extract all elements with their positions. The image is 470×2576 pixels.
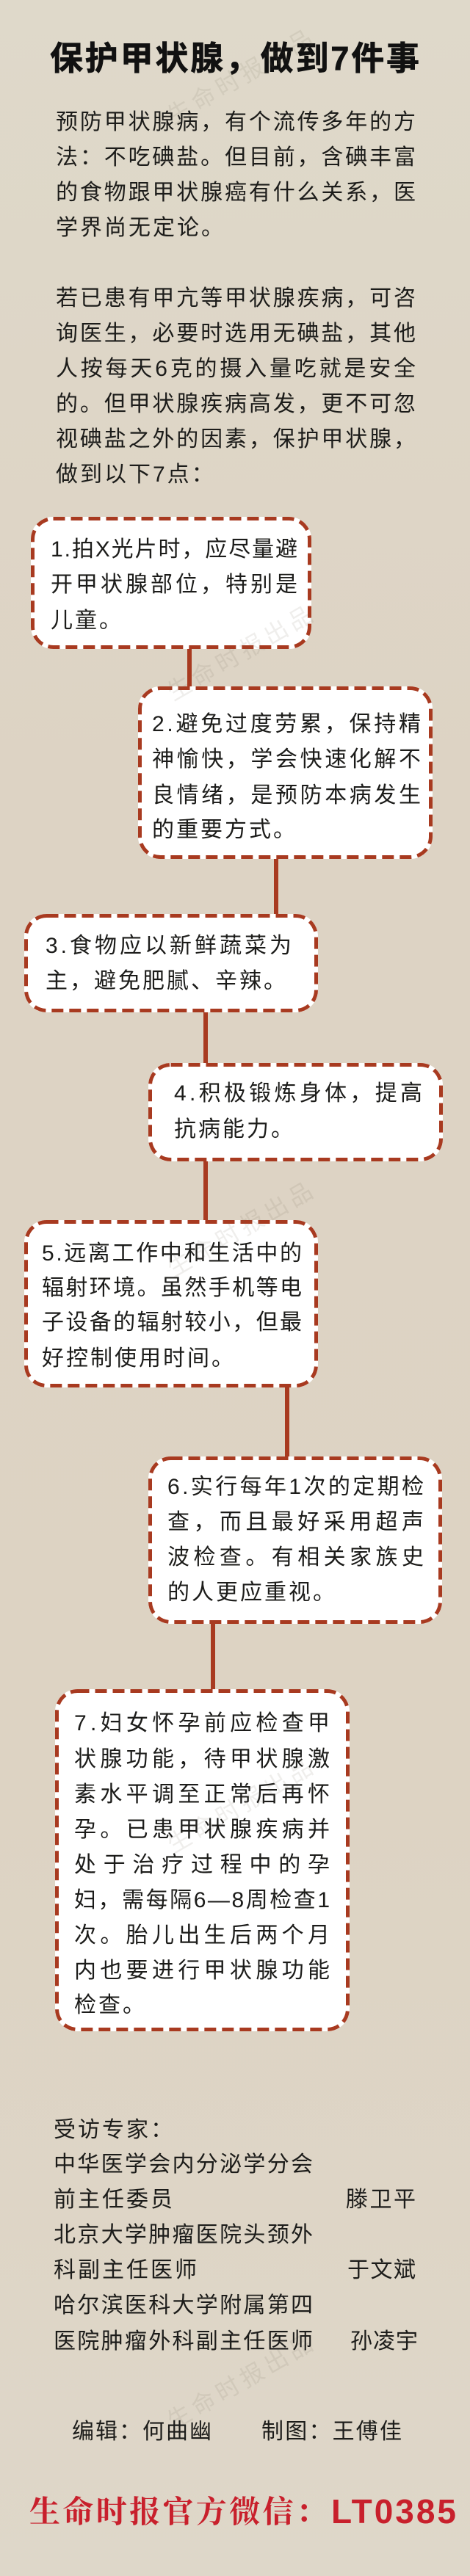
intro text block: 人按每天6克的摄入量吃就是安全	[56, 357, 416, 381]
panel: step 2	[140, 689, 430, 857]
interviewed experts: 孙凌宇	[350, 2329, 418, 2354]
panel: step 5: 5.远离工作中和生活中的	[42, 1241, 302, 1266]
panel: step 2: 2.避免过度劳累，保持精	[152, 712, 421, 736]
editor credits: 制图：王傅佳	[261, 2420, 402, 2444]
panel: step 4	[150, 1064, 441, 1160]
interviewed experts: 医院肿瘤外科副主任医师	[54, 2329, 313, 2354]
panel: step 6: 查，而且最好采用超声	[167, 1510, 424, 1534]
intro text block: 的食物跟甲状腺癌有什么关系，医	[56, 181, 416, 205]
panel: step 7: 内也要进行甲状腺功能	[74, 1959, 330, 1983]
official wechat line	[29, 2492, 456, 2530]
panel: step 3	[26, 916, 316, 1010]
interviewed experts: 前主任委员	[54, 2188, 175, 2212]
panel: step 3: 主，避免肥腻、辛辣。	[46, 969, 288, 993]
panel: step 6: 的人更应重视。	[167, 1581, 337, 1605]
intro text block: 若已患有甲亢等甲状腺疾病，可咨	[56, 286, 416, 311]
editor credits	[72, 2420, 402, 2444]
panel: step 5: 子设备的辐射较小，但最	[42, 1310, 302, 1335]
panel: step 2: 神愉快，学会快速化解不	[152, 747, 421, 772]
panel: step 7: 素水平调至正常后再怀	[74, 1782, 330, 1807]
intro text block: 的。但甲状腺疾病高发，更不可忽	[56, 392, 416, 416]
panel: step 2: 的重要方式。	[152, 818, 297, 842]
panel: step 7: 7.妇女怀孕前应检查甲	[74, 1711, 330, 1735]
panel: step 5: 辐射环境。虽然手机等电	[42, 1276, 302, 1300]
panel: step 1: 儿童。	[51, 609, 123, 633]
interviewed experts: 于文斌	[347, 2258, 416, 2282]
panel: step 1	[32, 518, 310, 647]
panel: step 7: 处于治疗过程中的孕	[74, 1853, 330, 1877]
watermark: footer: 生命时报出品	[163, 2328, 321, 2434]
connector: step 2 to 3	[274, 859, 278, 915]
connector: step 5 to 6	[285, 1387, 289, 1457]
panel: step 7: 次。胎儿出生后两个月	[74, 1923, 330, 1948]
connector: step 3 to 4	[203, 1012, 208, 1064]
panel: step 4: 4.积极锻炼身体，提高	[174, 1081, 422, 1106]
panel: step 7: 妇，需每隔6—8周检查1	[74, 1888, 330, 1912]
watermark: step 7: 生命时报出品	[163, 1752, 321, 1858]
panel: step 4: 抗病能力。	[174, 1117, 295, 1142]
intro text block: 预防甲状腺病，有个流传多年的方	[56, 110, 416, 134]
panel: step 7: 状腺功能，待甲状腺激	[74, 1747, 330, 1771]
panel: step 1: 1.拍X光片时，应尽量避	[51, 537, 297, 562]
interviewed experts	[54, 2118, 418, 2354]
intro text block	[56, 110, 416, 487]
interviewed experts: 科副主任医师	[54, 2258, 199, 2282]
watermark: step 5: 生命时报出品	[163, 1175, 321, 1282]
panel: step 6: 波检查。有相关家族史	[167, 1545, 424, 1570]
intro text block: 法：不吃碘盐。但目前，含碘丰富	[56, 145, 416, 170]
interviewed experts: 北京大学肿瘤医院头颈外	[54, 2223, 313, 2247]
interviewed experts: 受访专家：	[54, 2118, 175, 2142]
official wechat line: 生命时报官方微信：	[29, 2495, 327, 2530]
interviewed experts: 滕卫平	[346, 2188, 416, 2212]
panel: step 1: 开甲状腺部位，特别是	[51, 573, 297, 597]
panel: step 2: 良情绪，是预防本病发生	[152, 783, 421, 808]
editor credits: 编辑：何曲幽	[72, 2420, 212, 2444]
panel: step 5: 好控制使用时间。	[42, 1346, 236, 1371]
intro text block: 做到以下7点：	[56, 462, 216, 487]
panel: step 6	[150, 1458, 441, 1622]
connector: step 6 to 7	[211, 1624, 215, 1690]
watermark: top: 生命时报出品	[163, 23, 321, 129]
intro text block: 学界尚无定论。	[56, 216, 225, 240]
interviewed experts: 中华医学会内分泌学分会	[54, 2152, 313, 2177]
panel: step 3: 3.食物应以新鲜蔬菜为	[46, 934, 292, 958]
intro text block: 询医生，必要时选用无碘盐，其他	[56, 322, 416, 346]
panel: step 5	[26, 1222, 316, 1386]
connector: step 1 to 2	[187, 649, 192, 687]
watermark: step 1-2: 生命时报出品	[163, 599, 321, 705]
connector: step 4 to 5	[203, 1161, 208, 1221]
title: 保护甲状腺，做到7件事	[50, 40, 419, 77]
panel: step 7: 孕。已患甲状腺疾病并	[74, 1818, 330, 1842]
interviewed experts: 哈尔滨医科大学附属第四	[54, 2293, 313, 2318]
panel: step 6: 6.实行每年1次的定期检	[167, 1475, 424, 1499]
panel: step 7	[57, 1691, 348, 2029]
intro text block: 视碘盐之外的因素，保护甲状腺，	[56, 427, 416, 451]
official wechat line: LT0385	[331, 2492, 456, 2530]
panel: step 7: 检查。	[74, 1993, 147, 2017]
